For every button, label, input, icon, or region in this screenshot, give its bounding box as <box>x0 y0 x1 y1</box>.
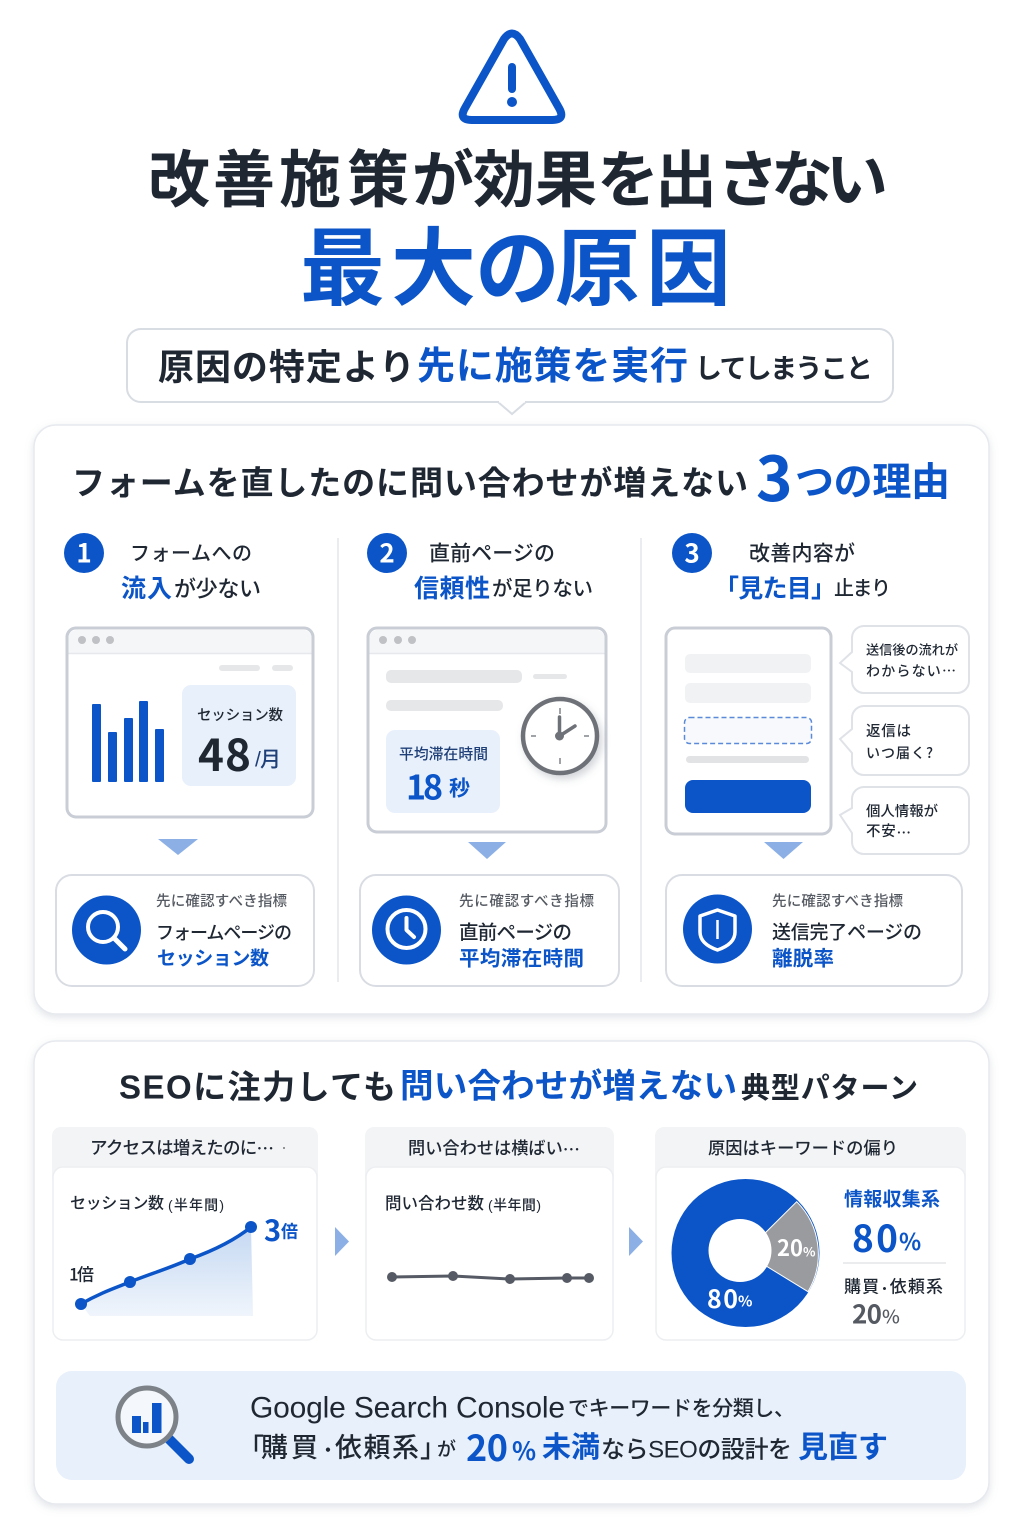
speech bubble 3: 不安… <box>866 822 911 842</box>
donut chart: % <box>803 1242 816 1260</box>
emphasised phrase: purchase keywords <box>238 1430 456 1466</box>
emphasised phrase: purchase keywords: 購買 <box>261 1433 318 1463</box>
reason 2 heading: が足りない <box>492 578 593 600</box>
card: inquiries <box>365 1127 614 1340</box>
arrow down <box>764 842 803 859</box>
form mock <box>666 628 831 834</box>
icon: chart magnifier <box>118 1388 189 1459</box>
reason 1 heading: 流入 <box>121 575 172 603</box>
metric card 2: 直前ページの <box>459 922 572 944</box>
line chart: inquiries <box>387 1271 594 1284</box>
reason 3 heading: 改善内容が <box>749 542 855 566</box>
speech bubble 3: 個人情報が <box>866 802 939 820</box>
icon: shield <box>683 894 752 964</box>
callout: action banner: 見直す <box>798 1432 888 1464</box>
legend: informational: 情報収集系 <box>844 1188 940 1210</box>
reason 2 heading: 信頼性 <box>414 575 490 603</box>
callout: action banner: % <box>512 1432 536 1468</box>
browser mock: dwell time <box>368 628 606 832</box>
panel heading: フォームを直したのに問い合わせが増えない <box>72 464 748 502</box>
metric card 1 <box>56 875 314 986</box>
donut chart <box>672 1179 820 1327</box>
speech bubble 2: 返信は <box>866 723 911 740</box>
metric card 3: 送信完了ページの <box>772 922 922 944</box>
reason 1 heading <box>64 533 261 603</box>
panel heading: 典型パターン <box>741 1072 918 1105</box>
panel heading: 3 <box>756 429 793 519</box>
stat: average time: 秒 <box>449 778 470 800</box>
card: sessions: アクセスは増えたのに… <box>90 1136 274 1160</box>
speech bubble 1: わからない… <box>866 661 956 681</box>
reason 2 heading <box>367 533 593 603</box>
arrow right <box>629 1227 643 1256</box>
card: sessions <box>52 1127 318 1340</box>
card: sessions: セッション数 <box>70 1194 164 1212</box>
callout: action banner: 未満 <box>542 1431 600 1464</box>
callout: action banner: でキーワードを分類し、 <box>568 1398 795 1420</box>
stat: sessions <box>182 685 296 786</box>
stat: average time: 18 <box>406 760 443 810</box>
callout: root cause: してしまうこと <box>695 354 873 384</box>
line chart: sessions: 1倍 <box>69 1260 94 1286</box>
legend: purchase <box>844 1274 943 1332</box>
callout: action banner: Google Search Console <box>250 1392 565 1424</box>
stat: sessions: /月 <box>255 748 281 772</box>
metric card 2: 先に確認すべき指標 <box>459 893 594 910</box>
speech bubble 1: 送信後の流れが <box>866 642 958 658</box>
speech bubble 2: いつ届く? <box>866 743 933 763</box>
legend: informational: % <box>899 1223 921 1257</box>
callout: root cause: 先に施策を実行 <box>417 346 688 388</box>
metric card 2: 平均滞在時間 <box>459 948 584 970</box>
metric card 3 <box>666 875 962 986</box>
icon: clock badge <box>372 896 441 964</box>
stat: sessions: セッション数 <box>197 707 284 724</box>
metric card 1: フォームページの <box>156 923 292 943</box>
title line 1: 改善施策が効果を出さない <box>148 146 888 216</box>
arrow right <box>335 1227 349 1256</box>
callout: action banner <box>56 1371 966 1480</box>
reason 3 heading: 止まり <box>834 577 891 600</box>
callout: root cause: 原因の特定より <box>158 346 415 388</box>
icon: magnifier <box>72 896 141 964</box>
stat: sessions: 48 <box>198 720 251 784</box>
bar chart <box>92 701 164 782</box>
title line 2: 最大の原因 <box>300 222 731 318</box>
stat: average time: 平均滞在時間 <box>399 746 488 763</box>
card: inquiries: (半年間) <box>488 1197 541 1213</box>
metric card 3: 離脱率 <box>772 948 834 970</box>
emphasised phrase: purchase keywords: ･ <box>322 1430 334 1466</box>
legend: purchase: % <box>882 1302 900 1330</box>
card: sessions: (半年間) <box>168 1197 224 1213</box>
legend: purchase: 20 <box>852 1294 882 1332</box>
metric card 1: セッション数 <box>157 948 269 970</box>
reason 3 heading <box>672 533 891 603</box>
reason 1 heading: フォームへの <box>130 543 252 565</box>
panel heading: つの理由 <box>795 462 950 504</box>
callout: root cause <box>127 329 893 414</box>
icon: clock <box>523 699 597 773</box>
reason 1 heading: 1 <box>76 534 92 570</box>
reason 2 heading: 2 <box>379 534 395 570</box>
legend: informational <box>844 1188 940 1263</box>
stat: average time <box>386 730 500 813</box>
donut chart: 20 <box>777 1231 803 1263</box>
reason 1 heading: が少ない <box>174 576 261 602</box>
line chart: sessions: 倍 <box>281 1222 298 1242</box>
panel: three reasons <box>34 425 989 1014</box>
callout: action banner: 20 <box>466 1420 508 1472</box>
card: inquiries: 問い合わせ数 <box>385 1194 484 1213</box>
arrow down <box>158 839 198 855</box>
callout: action banner: ならSEOの設計を <box>601 1436 792 1464</box>
arrow down <box>468 842 506 859</box>
emphasised phrase: purchase keywords: 「 <box>238 1433 264 1463</box>
speech bubble 3 <box>840 787 969 854</box>
speech bubble 1 <box>840 626 969 693</box>
metric card 3: 先に確認すべき指標 <box>772 893 904 910</box>
reason 2 heading: 直前ページの <box>429 542 555 566</box>
panel: SEO pattern <box>34 1041 989 1504</box>
card: inquiries: 問い合わせは横ばい… <box>408 1136 580 1160</box>
legend: informational: 80 <box>852 1209 898 1263</box>
card: keyword split: 原因はキーワードの偏り <box>708 1138 898 1158</box>
emphasised phrase: purchase keywords: 依頼系 <box>335 1433 419 1463</box>
reason 3 heading: 3 <box>684 534 700 570</box>
metric card 1: 先に確認すべき指標 <box>156 893 288 910</box>
panel heading <box>119 1068 918 1106</box>
card: keyword split <box>655 1127 966 1340</box>
speech bubble 2 <box>840 706 969 775</box>
line chart: sessions <box>69 1208 298 1316</box>
panel heading <box>72 429 950 519</box>
browser mock: session bars <box>67 628 313 817</box>
panel heading: SEOに注力しても <box>119 1068 396 1106</box>
donut chart: % <box>738 1290 752 1312</box>
emphasised phrase: purchase keywords: 」 <box>420 1433 446 1463</box>
metric card 2 <box>360 875 619 986</box>
line chart: sessions: 3 <box>264 1208 281 1250</box>
panel heading: 問い合わせが増えない <box>400 1068 737 1106</box>
legend: purchase: 購買･依頼系 <box>844 1274 943 1300</box>
reason 3 heading: 「見た目」 <box>714 575 836 603</box>
donut chart: 80 <box>707 1280 738 1316</box>
icon: warning triangle <box>463 34 561 120</box>
emphasised phrase: purchase keywords: が <box>437 1438 456 1460</box>
